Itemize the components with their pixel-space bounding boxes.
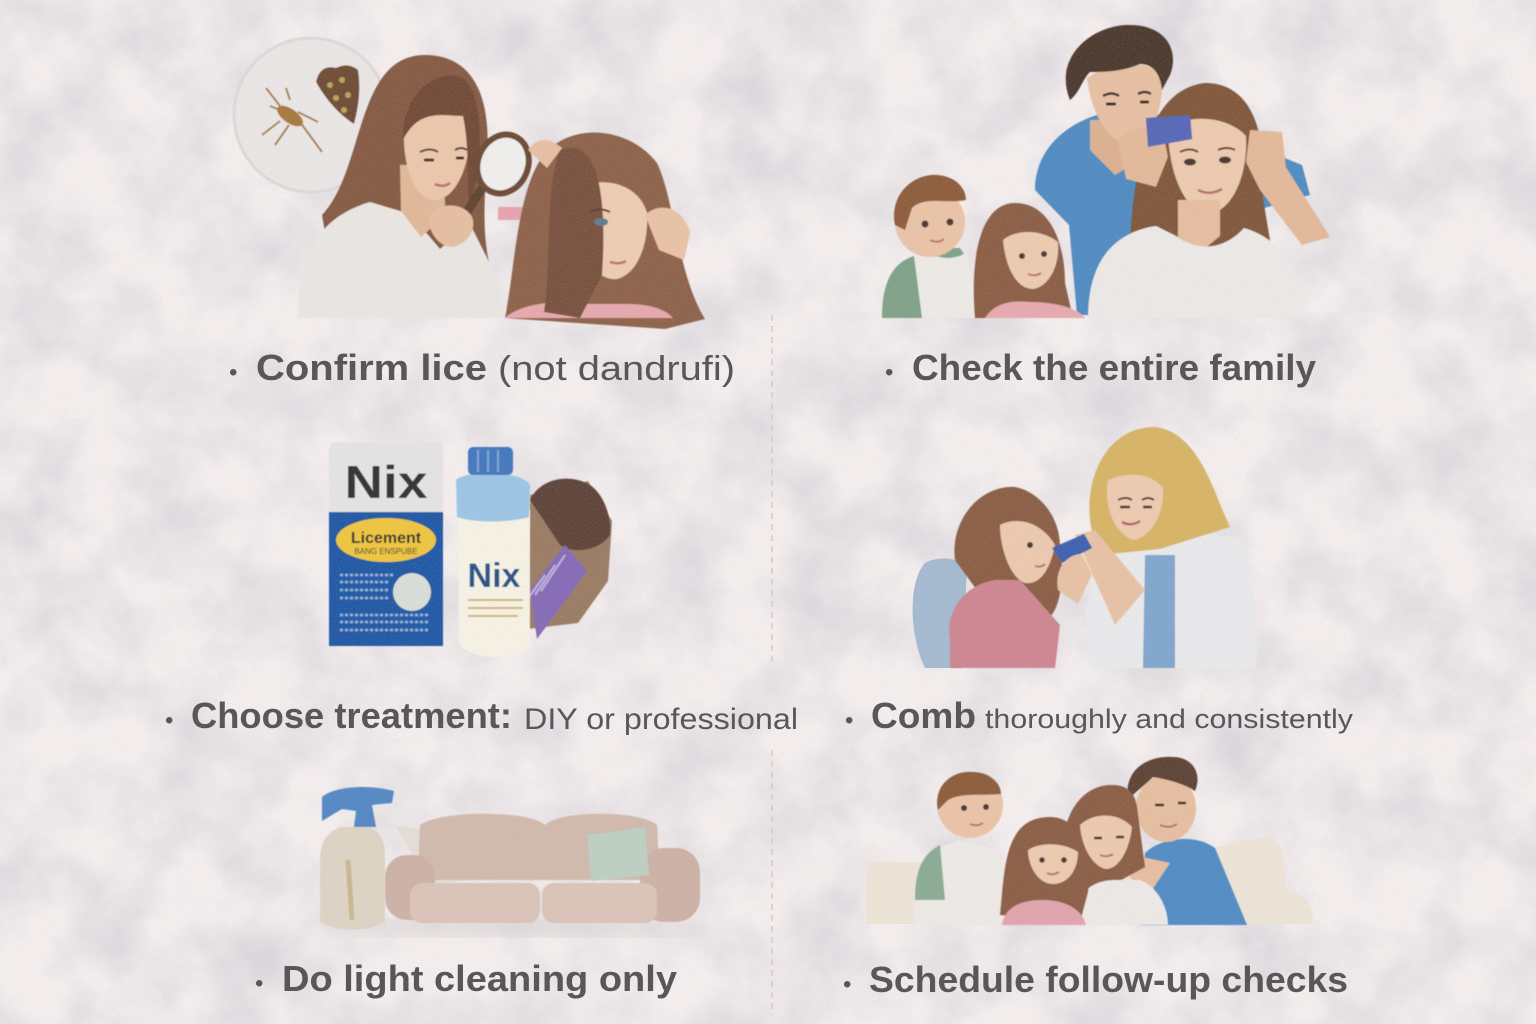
chair <box>913 558 967 668</box>
heading <box>165 695 798 736</box>
heading: Choose treatment: <box>191 695 512 736</box>
heading: • <box>255 970 263 997</box>
clinician <box>1075 427 1257 668</box>
panel: choose treatment <box>165 442 798 736</box>
Nix bottle <box>456 447 530 657</box>
Nix box: BANG ENSPUBE <box>354 547 418 556</box>
father <box>1035 25 1310 315</box>
spray bottle <box>320 787 394 930</box>
panel: light cleaning <box>255 787 710 999</box>
boy <box>882 175 979 318</box>
couch backdrop <box>866 837 1313 924</box>
heading: Comb <box>871 695 976 736</box>
icon: magnified lice circle <box>234 38 388 192</box>
heading: thoroughly and consistently <box>985 704 1354 734</box>
girl <box>974 203 1085 318</box>
panel: check family <box>882 25 1330 388</box>
girl <box>949 487 1092 668</box>
heading <box>845 695 1354 736</box>
boy <box>914 772 1005 925</box>
heading: • <box>165 707 173 734</box>
father's hand and comb <box>1118 115 1192 187</box>
sofa <box>385 814 700 923</box>
heading: • <box>845 707 853 734</box>
heading: • <box>885 359 893 386</box>
heading: Check the entire family <box>912 347 1316 388</box>
brush and combs <box>528 479 612 639</box>
girl <box>505 132 705 329</box>
shadow and mist <box>330 825 710 936</box>
center divider <box>771 315 773 1015</box>
Nix box: Licement <box>351 530 422 547</box>
girl <box>1000 817 1088 925</box>
panel: comb thoroughly <box>845 427 1354 736</box>
heading: Do light cleaning only <box>282 958 677 999</box>
Nix box <box>329 442 443 646</box>
heading: Confirm lice <box>256 347 487 388</box>
Nix box: Nix <box>344 456 428 508</box>
mother <box>1088 83 1330 318</box>
mother <box>1063 785 1168 925</box>
heading: • <box>843 971 851 998</box>
heading: Schedule follow-up checks <box>869 959 1348 1000</box>
Nix bottle: Nix <box>468 557 521 595</box>
father <box>1127 757 1247 925</box>
heading: DIY or professional <box>524 703 798 736</box>
heading: • <box>229 359 237 386</box>
woman with magnifier <box>298 55 537 318</box>
heading: (not dandrufi) <box>498 350 735 388</box>
panel: confirm lice <box>229 38 735 388</box>
panel: follow-up checks <box>843 757 1348 1000</box>
heading <box>229 347 735 388</box>
